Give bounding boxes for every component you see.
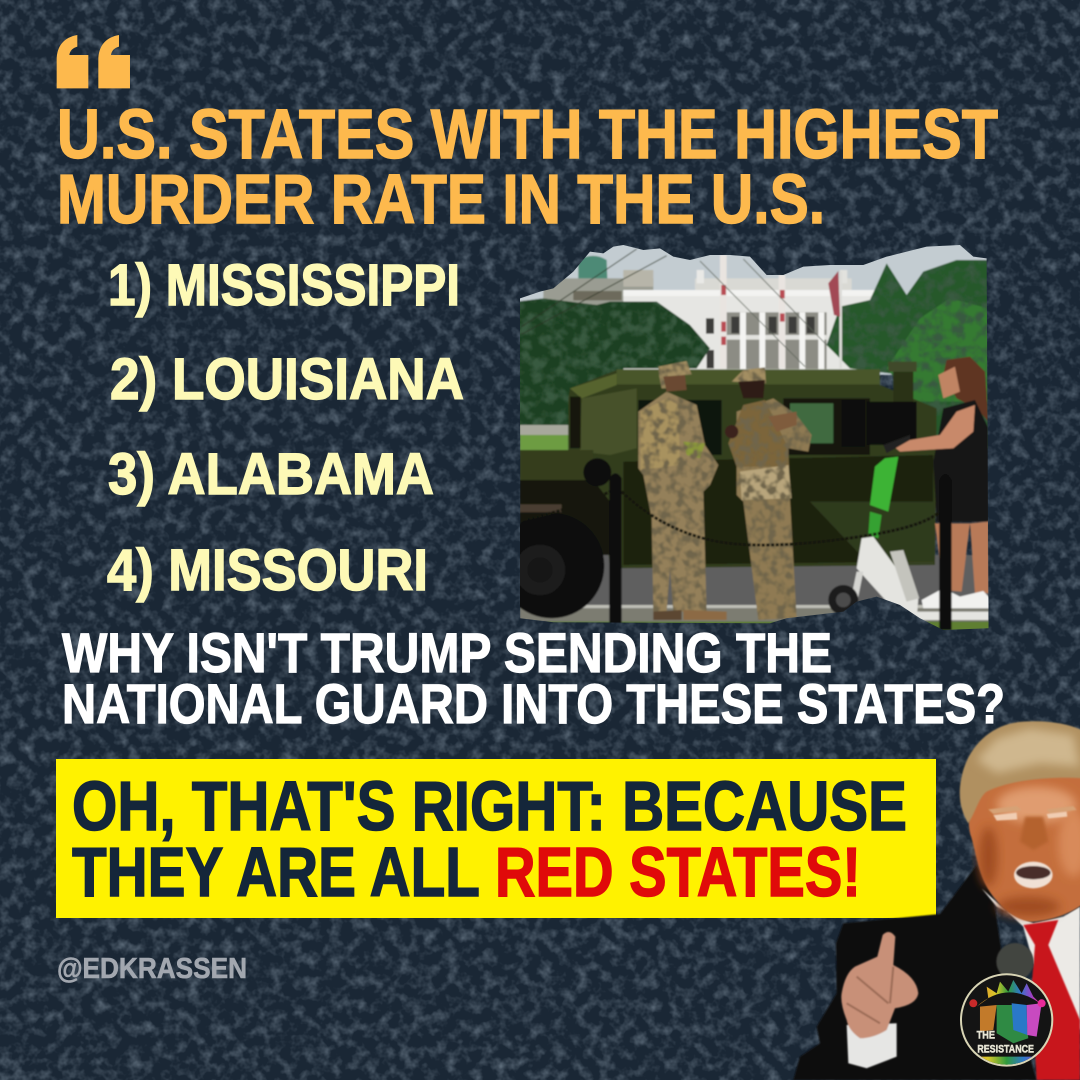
- title: [57, 95, 998, 238]
- badge label: THE: [977, 1029, 995, 1041]
- list item 1: 1) MISSISSIPPI: [108, 253, 460, 318]
- icon: opening quotation mark: [57, 35, 130, 88]
- hair: [960, 721, 1080, 823]
- face: [969, 773, 1080, 922]
- White House: [623, 270, 877, 370]
- badge: The Resistance: RESISTANCE: [977, 1043, 1034, 1055]
- shirt collar: [982, 888, 1080, 1030]
- right soldier face and hand: [725, 380, 797, 438]
- sky: [520, 245, 987, 376]
- left soldier boots: [653, 375, 727, 620]
- list item 4: 4) MISSOURI: [107, 538, 428, 603]
- pointing hand: [841, 932, 918, 1068]
- distant lawn: [520, 425, 990, 450]
- panel: yellow callout: [56, 759, 936, 918]
- red tie: [1023, 920, 1080, 1080]
- soldier on right: [728, 367, 812, 620]
- trees: [517, 260, 989, 448]
- flagpoles and flag: [720, 255, 842, 368]
- humvee: [520, 362, 937, 568]
- list item 3: 3) ALABAMA: [108, 442, 434, 507]
- road and kerb: [520, 555, 990, 632]
- ranked list of states: [107, 253, 464, 603]
- callout text line 1: OH, THAT'S RIGHT: BECAUSE: [72, 767, 907, 845]
- soldier on left: [638, 361, 718, 612]
- callout text line 2: THEY ARE ALL: [72, 833, 480, 911]
- green and white scooter: [828, 435, 989, 620]
- list item 2: 2) LOUISIANA: [110, 347, 464, 412]
- black bollard posts: [609, 473, 952, 630]
- microphone: [996, 943, 1034, 980]
- question text: WHY ISN'T TRUMP SENDING THE: [62, 621, 832, 684]
- question text: [62, 621, 1005, 735]
- hair highlight: [977, 728, 1080, 773]
- author handle: @EDKRASSEN: [57, 953, 247, 985]
- humvee wheel: [520, 504, 605, 619]
- background buildings and dome: [543, 256, 653, 308]
- badge: The Resistance: [960, 973, 1053, 1070]
- eyebrows and eyes: [988, 806, 1077, 821]
- chain barrier: [520, 492, 946, 545]
- title: MURDER RATE IN THE U.S.: [57, 160, 825, 238]
- woman on scooter: [890, 357, 990, 608]
- figure: Donald Trump pointing: [793, 721, 1080, 1080]
- open mouth: [1014, 862, 1053, 888]
- suit: [793, 865, 1037, 1080]
- nose: [1020, 817, 1048, 850]
- photo: national guard soldiers by a humvee at the White House: [499, 235, 1000, 632]
- overhead wires: [522, 249, 827, 367]
- highlighted red text: RED STATES!: [495, 833, 861, 911]
